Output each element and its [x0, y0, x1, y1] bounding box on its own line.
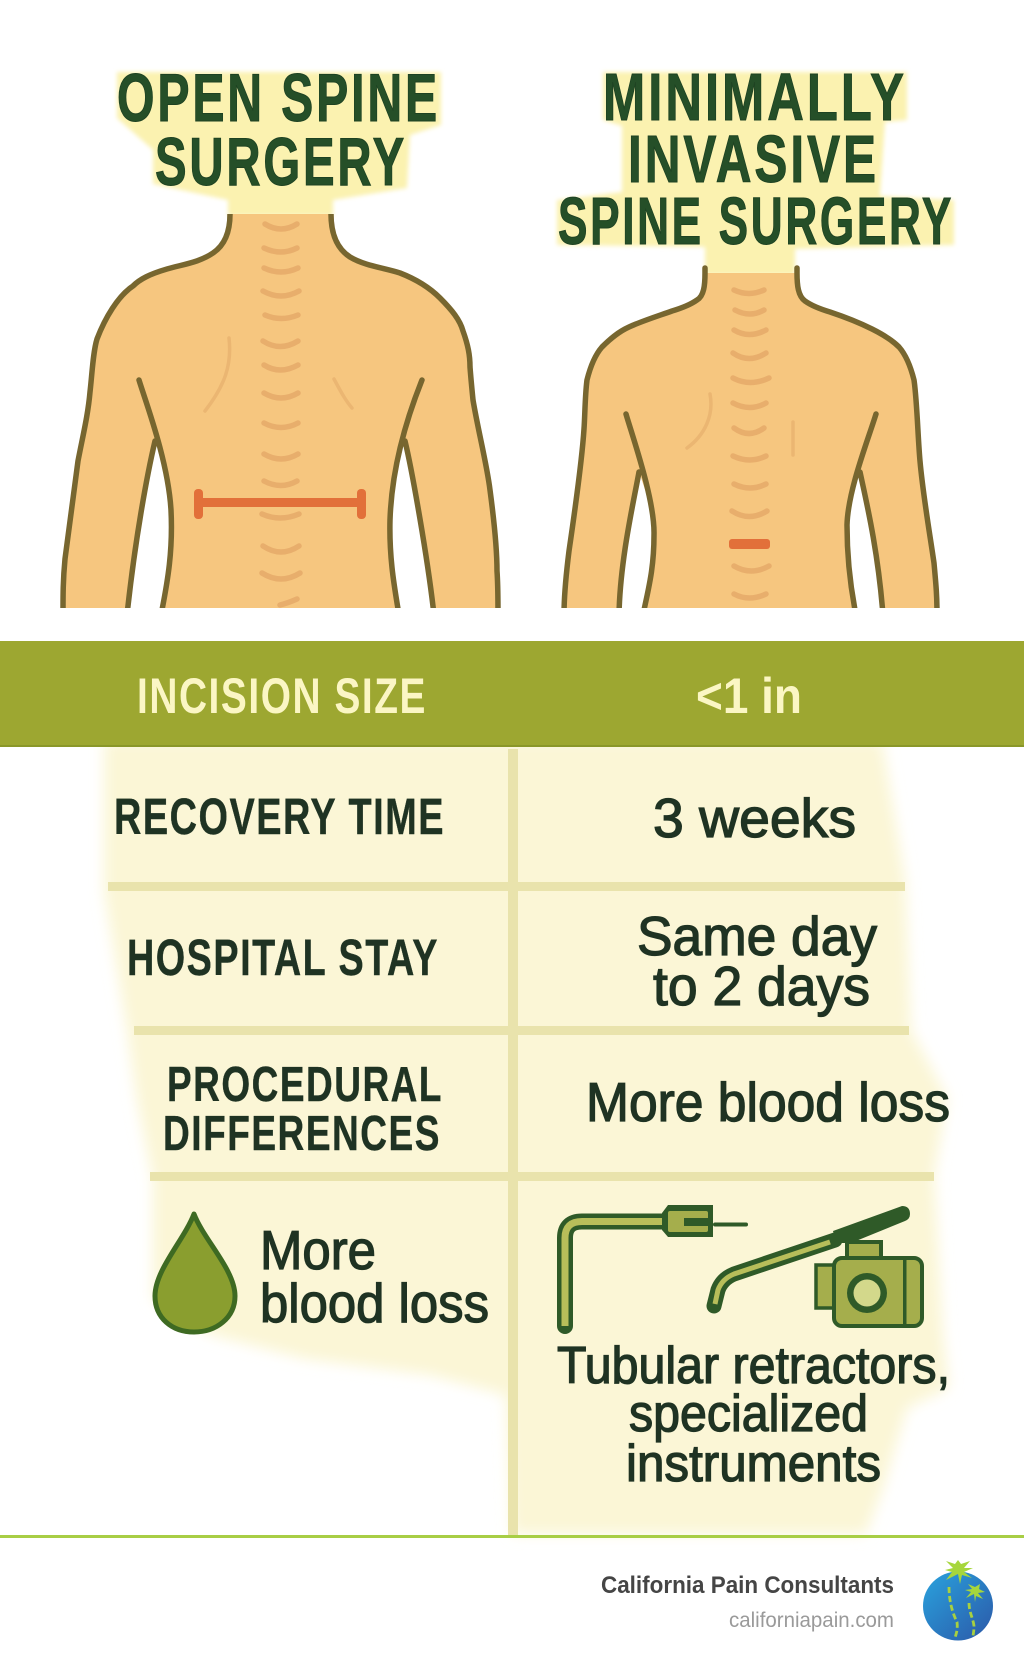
row: procedural differences: DIFFERENCES: [163, 1107, 441, 1161]
text: more blood loss: blood loss: [260, 1272, 489, 1334]
text: more blood loss: [260, 1219, 489, 1334]
row: hospital stay: Same day: [637, 905, 877, 967]
text: tubular retractors, specialized instruments: [557, 1337, 950, 1493]
figure: back with small incision: [564, 268, 937, 615]
row: recovery time: [114, 787, 856, 849]
row: recovery time: RECOVERY TIME: [114, 788, 445, 845]
title highlight: minimally invasive: [557, 72, 954, 275]
figure: back with long incision: [63, 210, 498, 615]
icon: blood drop: [155, 1214, 235, 1332]
footer: brand text: [601, 1572, 894, 1632]
title highlight: open spine surgery: [117, 72, 441, 216]
title: minimally invasive spine surgery: MINIMALLY: [603, 60, 907, 135]
row: hospital stay: [127, 905, 877, 1017]
icon: california pain logo: [923, 1560, 993, 1640]
title: open spine surgery: [117, 60, 440, 200]
row: procedural differences: PROCEDURAL: [167, 1058, 443, 1112]
incision: small: [729, 539, 770, 549]
panel: minimally invasive spine surgery: [557, 60, 954, 615]
row: recovery time: 3 weeks: [653, 787, 856, 849]
header band: incision size: INCISION SIZE: [137, 668, 427, 724]
text: tubular retractors, specialized instruments: specialized: [629, 1385, 868, 1443]
text: tubular retractors, specialized instruments: Tubular retractors,: [557, 1337, 950, 1395]
text: more blood loss: More: [260, 1219, 376, 1281]
footer rule: [0, 1535, 1024, 1538]
table dividers: [108, 749, 934, 1535]
row: hospital stay: HOSPITAL STAY: [127, 929, 439, 986]
panel: comparison table background: [104, 740, 949, 1534]
icon: tubular retractor: [565, 1205, 748, 1326]
incision: long: [194, 489, 366, 519]
header band: incision size: <1 in: [696, 668, 802, 724]
row: hospital stay: to 2 days: [653, 955, 870, 1017]
title: minimally invasive spine surgery: [558, 60, 954, 259]
row: procedural differences: [163, 1058, 950, 1161]
title: open spine surgery: SURGERY: [155, 124, 407, 200]
icon: specialized instrument: [714, 1206, 922, 1326]
panel: open spine surgery: [63, 60, 498, 615]
row: procedural differences: More blood loss: [586, 1071, 950, 1133]
text: tubular retractors, specialized instruments: instruments: [626, 1435, 881, 1493]
title: open spine surgery: OPEN SPINE: [117, 60, 440, 136]
title: minimally invasive spine surgery: INVASIVE: [628, 122, 879, 197]
footer: brand text: californiapain.com: [729, 1609, 894, 1632]
footer: brand text: California Pain Consultants: [601, 1572, 894, 1599]
header band: incision size: [0, 641, 1024, 747]
